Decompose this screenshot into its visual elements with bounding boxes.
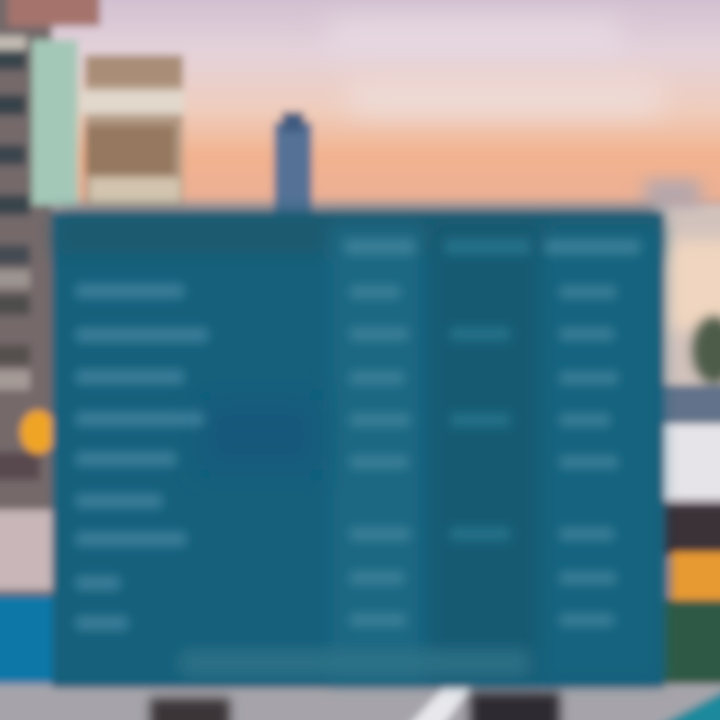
table header band bbox=[56, 212, 660, 256]
background: blue pool lower left bbox=[0, 595, 60, 720]
background: blue tower bbox=[274, 112, 312, 218]
table row text: fourth column bbox=[545, 240, 640, 626]
column shading bbox=[330, 225, 425, 680]
background: orange light bbox=[20, 410, 56, 454]
table footer band bbox=[180, 650, 530, 676]
background: sunset sky bbox=[0, 0, 720, 215]
table row text: first column bbox=[76, 284, 208, 630]
background: right side scenery bbox=[645, 180, 720, 700]
background: beige building bbox=[80, 55, 184, 205]
panel: teal table bbox=[52, 212, 664, 688]
table row text: third column bbox=[445, 240, 530, 540]
background: left tower building bbox=[0, 0, 100, 610]
table row text: second column bbox=[345, 240, 415, 626]
background: bottom foreground bbox=[0, 682, 720, 720]
